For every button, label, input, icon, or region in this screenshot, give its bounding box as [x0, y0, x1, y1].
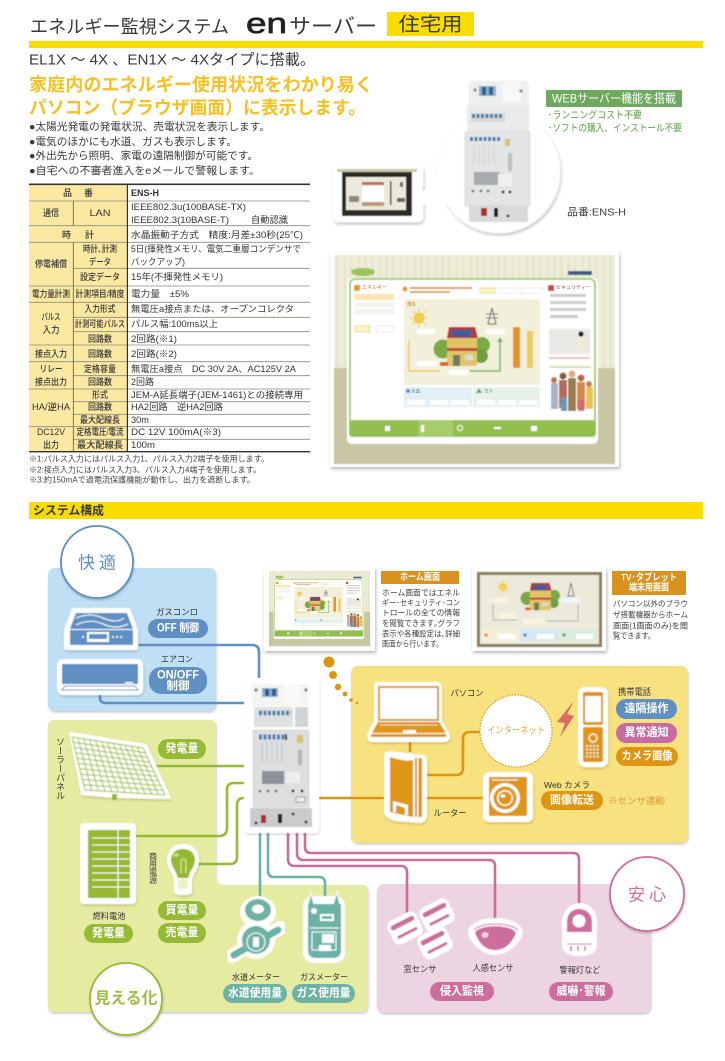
visualization badge: 見える化: [94, 990, 158, 1008]
mobile phone label: 携帯電話: [618, 686, 651, 697]
table row labels: [32, 187, 125, 450]
purchased power pill: 買電量: [166, 904, 199, 916]
table values: パルス幅:100ms以上: [131, 318, 218, 329]
icon: solar panel: [70, 733, 170, 800]
table values: 2回路: [131, 376, 154, 387]
icon: laptop: [367, 682, 450, 742]
router label: ルーター: [434, 808, 466, 818]
icon: light bulb: [167, 844, 199, 895]
mockup screen labels: ガス: [484, 388, 493, 394]
image transfer pill: [541, 791, 603, 810]
icon: wireless bolt: [557, 701, 574, 737]
browser screen mockup: [330, 252, 619, 467]
callout: web server feature: [546, 90, 682, 134]
badge: residential: [387, 12, 474, 36]
table row labels: 定格容量: [84, 363, 116, 374]
icon: fuel cell: [80, 823, 136, 904]
intrusion monitoring pill: 侵入監視: [440, 984, 484, 998]
water meter label: 水道メーター: [232, 972, 280, 982]
table row labels: 回路数: [88, 401, 112, 412]
air conditioner label: 制御: [166, 678, 190, 692]
tablet screen thumbnail: [472, 567, 606, 651]
sensor note: ※センサ連動: [608, 795, 665, 806]
table footnotes: ※2:接点入力にはパルス入力3、パルス入力4端子を使用します。: [29, 464, 261, 474]
table row labels: 品 番: [63, 187, 93, 198]
image transfer pill: 画像転送: [550, 792, 594, 806]
gas stove label: [148, 607, 208, 638]
feature bullets: [29, 120, 270, 177]
mockup screen labels: 水道: [411, 388, 420, 394]
connection lines: [100, 645, 579, 920]
table row labels: 時計､計測: [83, 243, 117, 254]
deterrent alarm pill: [549, 982, 613, 1001]
table row labels: パルス: [42, 312, 60, 322]
icon: air conditioner: [57, 659, 143, 695]
en server device: [465, 81, 530, 222]
deterrent alarm pill: 威嚇･警報: [556, 984, 606, 998]
air conditioner label: [149, 654, 207, 694]
alert pill: 異常通知: [624, 725, 668, 739]
icon: water meter: [232, 896, 280, 959]
panel: internet devices: [351, 666, 688, 843]
table values: 5日(揮発性メモリ、電気二重層コンデンサで: [131, 243, 301, 254]
table row labels: 回路数: [88, 348, 112, 359]
security section: [385, 857, 684, 1001]
callout: web server feature: WEBサーバー機能を搭載: [552, 92, 676, 106]
table row labels: 最大配線長: [80, 414, 120, 425]
table row labels: 停電補償: [35, 258, 67, 269]
table row labels: DC12V: [37, 427, 65, 437]
gas usage pill: ガス使用量: [296, 986, 351, 1000]
feature bullets: ●電気のほかにも水道、ガスも表示します。: [29, 135, 237, 148]
icon: gas stove: [64, 608, 138, 650]
table row labels: LAN: [90, 208, 110, 218]
table values: [131, 188, 303, 450]
tablet screen description: [612, 571, 688, 640]
callout: web server feature: ･ランニングコスト不要: [548, 108, 642, 122]
subtitle: EL1X ～ 4X 、EN1X ～ 4Xタイプに搭載。: [29, 52, 315, 68]
table footnotes: ※3:約150mAで過電流保護機能が動作し、出力を遮断します。: [29, 474, 255, 484]
feature bullets: ●自宅への不審者進入をeメールで警報します。: [29, 164, 260, 177]
product photo: [333, 81, 560, 233]
gas meter label: ガスメーター: [300, 972, 348, 982]
home screen description: を閲覧できます｡グラフ: [382, 618, 460, 628]
table values: 2回路(※1): [131, 333, 177, 344]
mockup screen labels: エネルギー: [362, 285, 387, 291]
headline: 家庭内のエネルギー使用状況をわかり易く: [29, 75, 373, 95]
specification table: [29, 184, 310, 452]
water meter: [223, 896, 287, 1003]
icon: web camera: [483, 772, 533, 822]
table values: 100m: [131, 440, 155, 450]
panel: comfort: [48, 568, 216, 711]
table values: 無電圧a接点または、オープンコレクタ: [131, 303, 294, 314]
distribution panel photo: [333, 165, 446, 222]
link dots: [324, 656, 358, 704]
table row labels: 形式: [92, 389, 108, 400]
home screen description: ギー･セキュリティ･コン: [382, 598, 460, 608]
gas meter: [292, 892, 355, 1003]
icon: motion sensor: [468, 918, 523, 955]
internet section: [367, 682, 678, 823]
remote control pill: [616, 699, 677, 719]
laptop label: パソコン: [450, 688, 484, 698]
home screen description: 画面から行います。: [382, 638, 443, 648]
sold power pill: 売電量: [166, 925, 199, 939]
mockup screen labels: [362, 285, 591, 394]
table values: 電力量 ±5%: [131, 288, 189, 299]
motion sensor label: 人感センサ: [472, 963, 514, 973]
table values: ENS-H: [131, 188, 159, 198]
table row labels: 出力: [43, 439, 59, 450]
table values: バックアップ): [131, 257, 185, 267]
home screen description: [381, 571, 460, 648]
product number: 品番:ENS-H: [567, 206, 626, 218]
tablet screen description: パソコン以外のブラウ: [613, 598, 688, 608]
home screen description: ホーム画面: [400, 572, 440, 583]
tablet screen description: 端末用画面: [629, 582, 669, 594]
panel: security: [377, 884, 651, 1013]
internet cloud: インターネット: [487, 726, 545, 736]
table row labels: 時 計: [62, 229, 94, 240]
panel: visualization: [48, 720, 368, 1012]
en server device: [244, 678, 319, 833]
commercial power label: 商用電源: [148, 851, 158, 885]
table row labels: 通信: [43, 207, 59, 218]
product name: [246, 8, 377, 40]
callout: web server feature: ･ソフトの購入、インストール不要: [548, 122, 682, 134]
table values: HA2回路 逆HA2回路: [131, 401, 223, 412]
table values: 15年(不揮発性メモリ): [131, 271, 223, 282]
header rule: [29, 41, 703, 48]
product name: en: [246, 8, 287, 40]
fuel cell: [80, 823, 136, 943]
tablet screen description: TV･タブレット: [621, 572, 677, 584]
table row labels: 接点入力: [35, 348, 67, 359]
table row labels: 定格電圧/電流: [76, 426, 124, 437]
table values: 30m: [131, 415, 149, 425]
home screen description: 表示や各種設定は､詳細: [382, 628, 460, 638]
magnifier circle: [423, 111, 560, 233]
solar output pill: [158, 739, 206, 759]
table row labels: 接点出力: [35, 376, 67, 387]
table values: IEEE802.3u(100BASE-TX): [131, 202, 246, 212]
water usage pill: 水道使用量: [228, 986, 282, 1000]
headline: パソコン（ブラウザ画面）に表示します。: [29, 97, 366, 118]
gas stove label: OFF 制御: [157, 620, 199, 634]
web camera label: Web カメラ: [544, 780, 590, 790]
table footnotes: ※1:パルス入力にはパルス入力1、パルス入力2端子を使用します。: [29, 454, 269, 464]
mockup screen labels: 電気: [407, 300, 416, 308]
fuel cell output pill: 発電量: [92, 926, 125, 940]
security badge: 安心: [628, 886, 666, 904]
table row labels: 入力形式: [84, 303, 116, 314]
table footnotes: [29, 454, 269, 484]
title: エネルギー監視システム: [30, 17, 229, 37]
icon: mobile phone: [578, 687, 608, 767]
window sensor label: 窓センサ: [404, 964, 436, 974]
table row labels: データ: [89, 256, 111, 267]
mockup screen labels: セキュリティー: [556, 285, 591, 291]
remote control pill: 遠隔操作: [624, 701, 669, 715]
alert pill: [616, 723, 677, 743]
table row labels: 計測項目/精度: [76, 288, 124, 299]
visualization badge: [90, 963, 162, 1035]
solar panel label: ソーラーパネル: [55, 737, 65, 800]
air conditioner label: エアコン: [161, 654, 193, 664]
internet cloud: [480, 695, 552, 767]
home screen description: ホーム画面ではエネル: [382, 588, 460, 598]
table row labels: 電力量計測: [32, 288, 70, 299]
table row labels: 最大配線長: [77, 439, 123, 450]
camera image pill: カメラ画像: [622, 748, 673, 762]
badge: residential: 住宅用: [398, 14, 462, 36]
icon: gas meter: [303, 892, 345, 963]
table values: 無電圧a接点 DC 30V 2A、AC125V 2A: [131, 363, 296, 374]
warning light label: 警報灯など: [560, 965, 601, 975]
section heading: system configuration: システム構成: [33, 502, 104, 518]
tablet screen description: ザ搭載機器からホーム: [613, 610, 688, 620]
table values: JEM-A延長端子(JEM-1461)との接続専用: [131, 389, 303, 400]
home screen thumbnail: [264, 567, 375, 651]
feature bullets: ●太陽光発電の発電状況、売電状況を表示します。: [29, 120, 270, 133]
table row labels: 回路数: [88, 333, 112, 344]
section heading: system configuration: [29, 502, 703, 519]
solar panel: [55, 733, 206, 800]
fuel cell label: 燃料電池: [92, 911, 126, 921]
intrusion monitoring pill: [430, 982, 494, 1001]
gas stove label: ガスコンロ: [156, 607, 198, 617]
headline: [29, 75, 373, 118]
utility power: [148, 844, 206, 943]
table values: 水晶振動子方式 精度:月差±30秒(25℃): [131, 229, 303, 240]
home screen description: トロールの全ての情報: [382, 608, 460, 618]
icon: window sensors: [385, 896, 457, 962]
table row labels: HA/逆HA: [32, 401, 70, 412]
tablet screen description: 覧できます。: [613, 630, 655, 640]
table row labels: 入力: [42, 324, 60, 335]
table values: 自動認識: [251, 214, 288, 225]
page header: [29, 8, 703, 48]
solar output pill: 発電量: [166, 741, 199, 755]
product name: サーバー: [289, 16, 377, 38]
comfort badge: 快適: [78, 554, 116, 572]
security badge: [610, 857, 684, 931]
camera image pill: [616, 747, 678, 766]
feature bullets: ●外出先から照明、家電の遠隔制御が可能です。: [29, 149, 258, 162]
table values: DC 12V 100mA(※3): [131, 427, 221, 437]
table row labels: リレー: [40, 364, 62, 374]
table row labels: 回路数: [88, 376, 112, 387]
table values: 2回路(※2): [131, 348, 177, 359]
tablet screen description: 画面(1画面のみ)を閲: [613, 622, 688, 630]
table values: IEEE802.3(10BASE-T): [131, 215, 229, 225]
comfort badge: [61, 526, 133, 598]
icon: router: [384, 751, 427, 823]
table row labels: 計測可能パルス: [75, 318, 125, 329]
air conditioner label: ON/OFF: [157, 670, 199, 682]
table row labels: 設定データ: [80, 271, 120, 282]
icon: warning light: [562, 903, 597, 956]
